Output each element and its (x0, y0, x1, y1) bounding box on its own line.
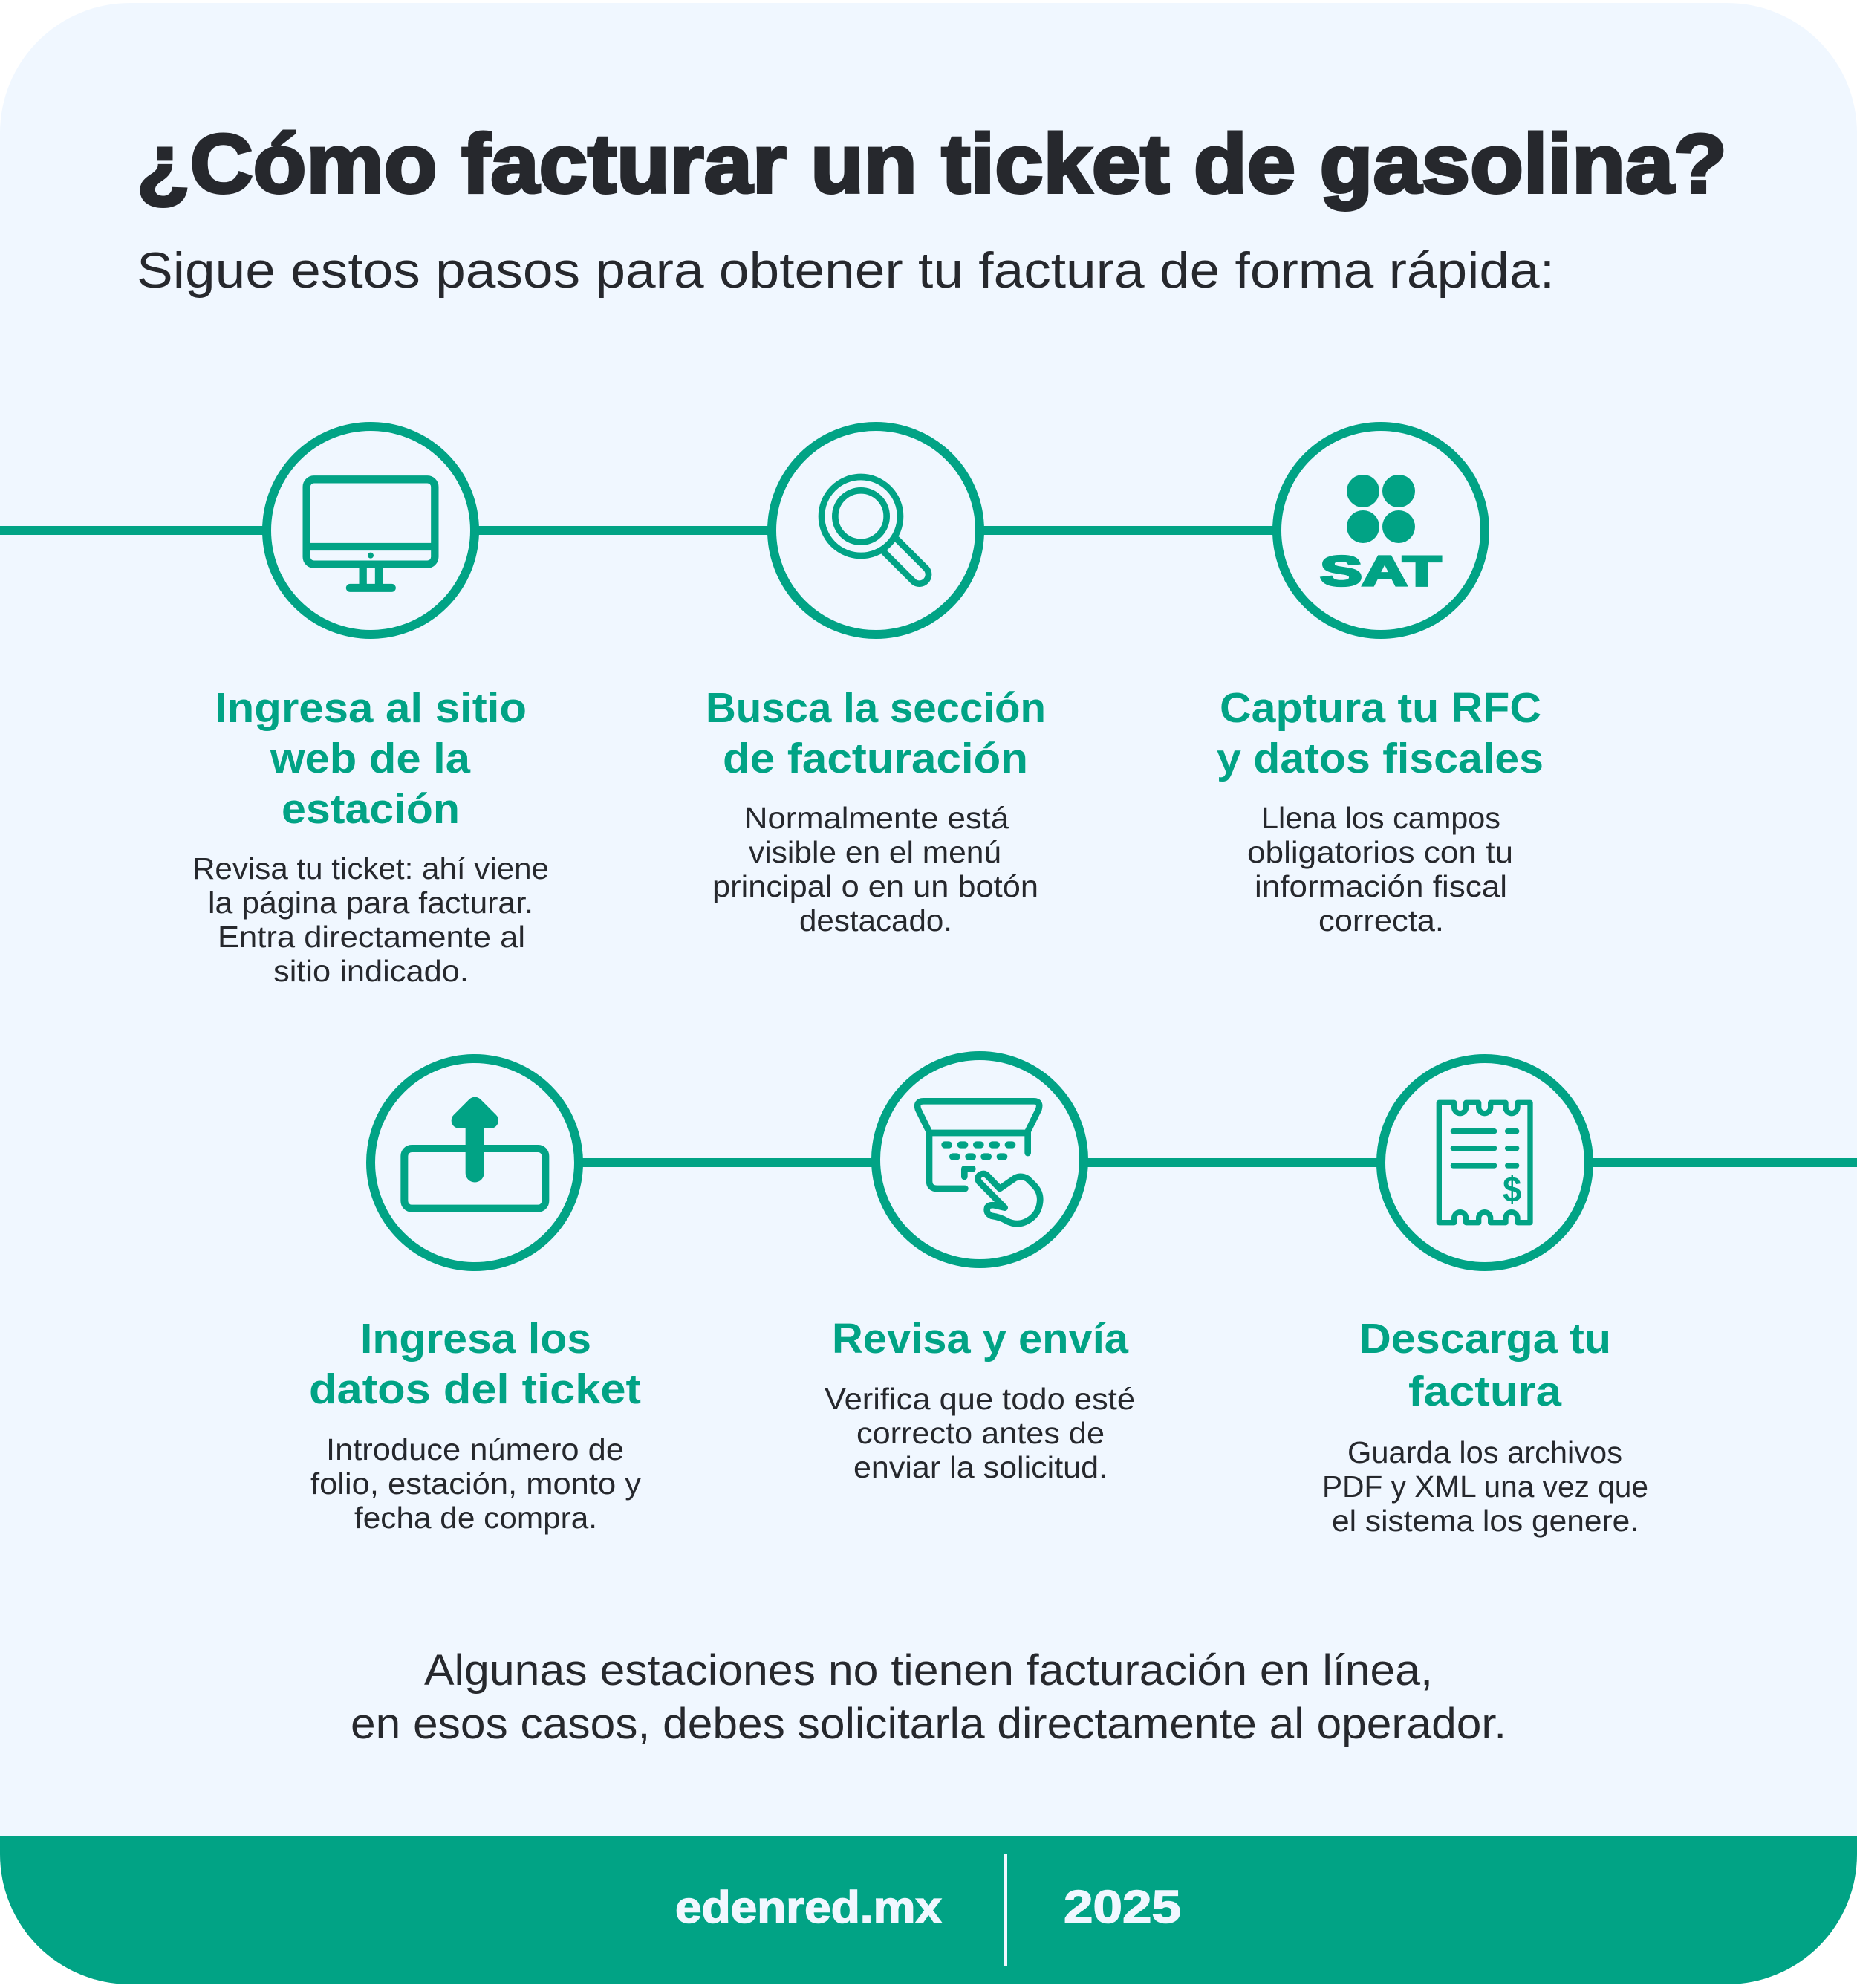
text: step 4 description: Introduce número de (326, 1432, 624, 1466)
icon: magnifier (772, 426, 980, 634)
text: step 3 description (1247, 801, 1513, 938)
icon: monitor (267, 426, 475, 634)
text: step 5 description: Verifica que todo esté (825, 1382, 1135, 1416)
heading: step 3: Captura tu RFC (1220, 684, 1541, 732)
text: step 1 description (192, 851, 549, 988)
connector line: row 1 (0, 526, 1381, 535)
text: step 3 description: información fiscal (1255, 869, 1507, 903)
text: step 2 description: destacado. (799, 903, 952, 938)
heading: step 6: factura (1408, 1368, 1562, 1415)
text: step 2 description: visible en el menú (749, 835, 1001, 869)
text: step 6 description (1322, 1435, 1648, 1538)
icon: laptop with pointing hand (876, 1056, 1084, 1264)
text: step 4 description: fecha de compra. (354, 1501, 597, 1535)
footer band (0, 1836, 1857, 1984)
heading: step 1 (215, 684, 527, 833)
connector line: row 2 (475, 1158, 1857, 1167)
text: step 3 description: Llena los campos (1261, 801, 1500, 835)
text: step 1 description: Entra directamente al (218, 920, 525, 954)
heading: step 4: Ingresa los (360, 1315, 591, 1362)
heading: step 4 (309, 1315, 641, 1413)
text: step 4 description (310, 1432, 642, 1535)
text: step 6 description: el sistema los genere. (1332, 1504, 1639, 1538)
text: step 1 description: la página para facturar. (208, 886, 533, 920)
icon: receipt (1381, 1059, 1589, 1267)
text: step 5 description: enviar la solicitud. (853, 1450, 1108, 1484)
heading: step 1: web de la (270, 735, 471, 782)
closing note: en esos casos, debes solicitarla directamente al operador. (351, 1700, 1506, 1748)
text: step 5 description (825, 1382, 1135, 1484)
heading: step 1: Ingresa al sitio (215, 684, 527, 732)
panel: step 5 (825, 1056, 1135, 1484)
text: step 4 description: folio, estación, monto y (310, 1466, 642, 1501)
title: ¿Cómo facturar un ticket de gasolina? (137, 117, 1727, 210)
icon: receipt: $ (1503, 1169, 1521, 1209)
heading: step 2 (706, 684, 1046, 782)
icon: SAT logo (1277, 426, 1485, 634)
closing note (351, 1646, 1506, 1748)
icon: SAT logo: SAT (1320, 548, 1441, 595)
heading: step 3 (1217, 684, 1544, 782)
footer: website: edenred.mx (675, 1883, 942, 1932)
panel: step 3 (1217, 426, 1544, 938)
heading: step 6 (1359, 1315, 1611, 1415)
panel: step 4 (309, 1059, 642, 1535)
footer: year: 2025 (1064, 1882, 1181, 1933)
text: step 5 description: correcto antes de (856, 1416, 1105, 1450)
text: step 6 description: PDF y XML una vez que (1322, 1469, 1648, 1504)
text: step 3 description: correcta. (1318, 903, 1444, 938)
text: step 2 description (712, 801, 1038, 938)
text: step 1 description: sitio indicado. (273, 954, 469, 988)
subtitle: Sigue estos pasos para obtener tu factura de forma rápida: (137, 242, 1555, 299)
heading: step 2: de facturación (723, 735, 1028, 782)
heading: step 5: Revisa y envía (832, 1315, 1129, 1362)
text: step 2 description: Normalmente está (744, 801, 1009, 835)
text: step 1 description: Revisa tu ticket: ahí viene (192, 851, 549, 886)
heading: step 4: datos del ticket (309, 1365, 641, 1413)
closing note: Algunas estaciones no tienen facturación en línea, (424, 1646, 1433, 1695)
icon: upload (371, 1059, 579, 1267)
text: step 3 description: obligatorios con tu (1247, 835, 1513, 869)
text: step 2 description: principal o en un botón (712, 869, 1038, 903)
heading: step 1: estación (282, 785, 460, 833)
panel: step 1 (192, 426, 549, 988)
panel: step 6 (1322, 1059, 1648, 1538)
heading: step 2: Busca la sección (706, 684, 1046, 732)
text: step 6 description: Guarda los archivos (1347, 1435, 1622, 1469)
heading: step 3: y datos fiscales (1217, 735, 1544, 782)
heading: step 6: Descarga tu (1359, 1315, 1611, 1362)
panel: step 2 (706, 426, 1046, 938)
